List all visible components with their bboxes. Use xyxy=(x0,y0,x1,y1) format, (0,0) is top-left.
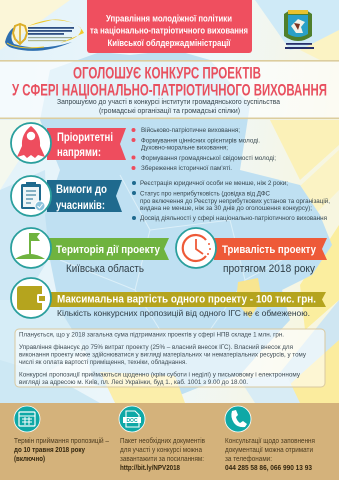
coat of arms xyxy=(284,10,314,49)
header organisation logo xyxy=(5,19,84,51)
title xyxy=(12,64,327,100)
footer column: documents: http://bit.ly/NPV2018 xyxy=(120,465,180,472)
ribbon: territory: Територія дії проекту xyxy=(56,244,161,256)
map shape xyxy=(40,50,332,395)
footer column: contacts: за телефонами: xyxy=(225,456,272,463)
ribbon: territory xyxy=(48,238,169,260)
footer column: contacts: Консультації щодо заповнення xyxy=(225,437,315,445)
panel: details: Управління фінансує до 75% витрат проекту (25% – власний внесок ІГС). Власний внесок для xyxy=(19,343,293,351)
list: priorities xyxy=(132,126,276,172)
ribbon: priorities xyxy=(47,128,126,160)
header red box: Управління молодіжної політики xyxy=(106,14,232,24)
list: requirements xyxy=(132,179,330,222)
footer column: documents: для участі у конкурсі можна xyxy=(120,446,202,454)
list: requirements: Статус про неприбутковість (довідка від ДФС xyxy=(140,190,270,198)
text: period: протягом 2018 року xyxy=(223,263,315,275)
panel: details: вигляді за адресою м. Київ, пл. Лесі Українки, буд 1., каб. 1001 з 9.00 до 18.00. xyxy=(19,378,248,386)
ribbon: budget: Максимальна вартість одного проекту - 100 тис. грн. xyxy=(57,294,316,306)
ribbon: requirements xyxy=(47,180,122,212)
list: priorities: Духовно-моральне виховання; xyxy=(141,144,228,152)
list: requirements: Реєстрація юридичної особи не менше, ніж 2 роки; xyxy=(140,179,288,187)
ribbon: priorities: напрями: xyxy=(57,145,101,159)
footer column: documents xyxy=(119,406,205,472)
panel: details: Планується, що у 2018 загальна сума підтриманих проектів у сфері НПВ складе 1 млн. грн. xyxy=(19,330,284,338)
subtitle: (громадські організації та громадські спілки) xyxy=(99,107,240,115)
icon: rocket xyxy=(11,123,51,163)
panel: details xyxy=(15,329,325,387)
list: requirements: про включення до Реєстру неприбуткових установ та організацій, xyxy=(140,197,330,205)
title: ОГОЛОШУЄ КОНКУРС ПРОЕКТІВ xyxy=(73,64,261,82)
footer column: deadline xyxy=(14,406,109,463)
icon: flag xyxy=(11,228,51,268)
subtitle xyxy=(57,98,280,115)
footer column: contacts: 044 285 58 86, 066 990 13 93 xyxy=(225,465,312,472)
list: priorities: Збереження історичної пам'яті. xyxy=(141,164,232,172)
footer xyxy=(0,403,339,480)
panel: details: Конкурсні пропозиції приймаються щоденно (крім суботи і неділі) у письмовому і електронному xyxy=(19,370,301,378)
panel: territory xyxy=(11,228,169,275)
panel: requirements xyxy=(11,176,330,222)
footer column: documents: завантажити за посиланням: xyxy=(120,456,204,463)
icon: clipboard xyxy=(11,176,51,216)
subtitle: Запрошуємо до участі в конкурсі інститути громадянського суспільства xyxy=(57,98,280,106)
ribbon: requirements: Вимоги до xyxy=(56,182,107,196)
footer column: deadline: до 10 травня 2018 року xyxy=(14,447,85,454)
icon: wallet xyxy=(11,278,51,318)
icon: phone xyxy=(225,406,251,432)
panel: details: числі як оплата вартості приміщення, техніки, обладнання. xyxy=(19,358,187,366)
ribbon: requirements: учасників: xyxy=(56,198,105,212)
icon: clock xyxy=(176,228,216,268)
panel: budget xyxy=(11,278,326,318)
footer column: documents: Пакет необхідних документів xyxy=(120,437,205,445)
text: proposals: Кількість конкурсних пропозицій від одного ІГС не є обмеженою. xyxy=(57,309,310,318)
header red box: Київської облдержадміністрації xyxy=(108,38,231,48)
ribbon: duration xyxy=(214,238,327,260)
header red box: та національно-патріотичного виховання xyxy=(90,26,248,36)
footer column: deadline: Термін приймання пропозицій – xyxy=(14,437,109,445)
ribbon: duration: Тривалість проекту xyxy=(222,244,317,256)
ribbon: priorities: Пріоритетні xyxy=(57,130,113,144)
footer column: deadline: (включно) xyxy=(14,456,45,463)
icon: document: DOC xyxy=(126,418,138,424)
panel: duration xyxy=(176,228,327,275)
footer column: contacts: документації можна отримати xyxy=(225,446,313,454)
panel: details: виконання проекту може здійснюватися у вигляді матеріальних чи нематеріальних ресурсів, у тому xyxy=(19,350,307,358)
panel: priorities xyxy=(11,123,276,172)
list: requirements: Досвід діяльності у сфері національно-патріотичного виховання xyxy=(140,214,327,222)
header red box xyxy=(87,0,252,53)
list: priorities: Формування ціннісних орієнтирів молоді. xyxy=(141,136,260,144)
text: region: Київська область xyxy=(66,263,144,275)
icon: calendar xyxy=(14,406,40,432)
list: priorities: Військово-патріотичне виховання; xyxy=(141,126,240,134)
footer column: contacts xyxy=(225,406,315,472)
title band xyxy=(0,60,339,119)
list: requirements: видана не менше, ніж за 30 днів до оголошення конкурсу); xyxy=(140,204,312,212)
list: priorities: Формування громадянської свідомості молоді; xyxy=(141,154,276,162)
